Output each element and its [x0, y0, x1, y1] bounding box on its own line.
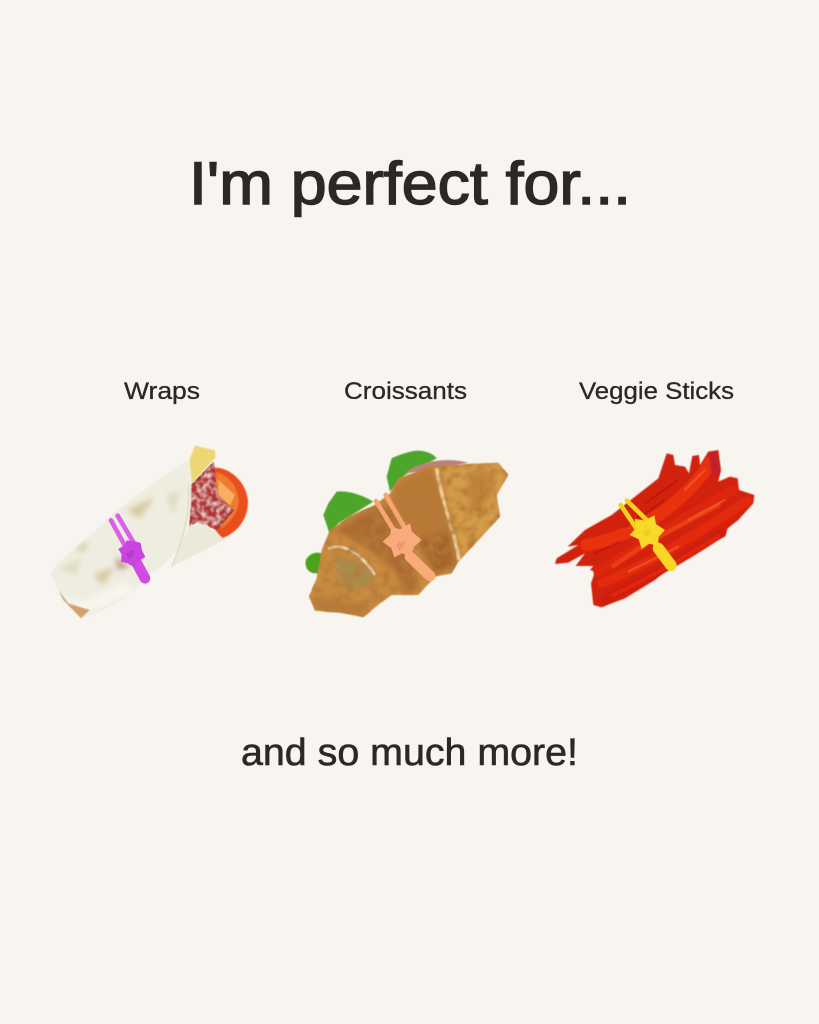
- lettuce: [387, 451, 437, 492]
- band: purple: IP: [125, 548, 137, 561]
- ham: [405, 460, 468, 473]
- label: veggie sticks: Veggie Sticks: [579, 378, 734, 405]
- band: yellow: [621, 501, 671, 565]
- band: yellow: IP: [641, 526, 654, 539]
- band: orange: [376, 495, 430, 576]
- illustration: wrap with purple band: [50, 445, 249, 619]
- label: wraps: Wraps: [124, 378, 200, 405]
- illustration: croissant with orange band: [304, 450, 509, 618]
- title: I'm perfect for...: [189, 150, 631, 217]
- illustration: red pepper sticks with yellow band: [555, 450, 754, 607]
- band: orange: IP: [395, 539, 408, 552]
- closing text: and so much more!: [241, 732, 578, 774]
- label: croissants: Croissants: [344, 378, 467, 405]
- band: purple: [111, 516, 145, 578]
